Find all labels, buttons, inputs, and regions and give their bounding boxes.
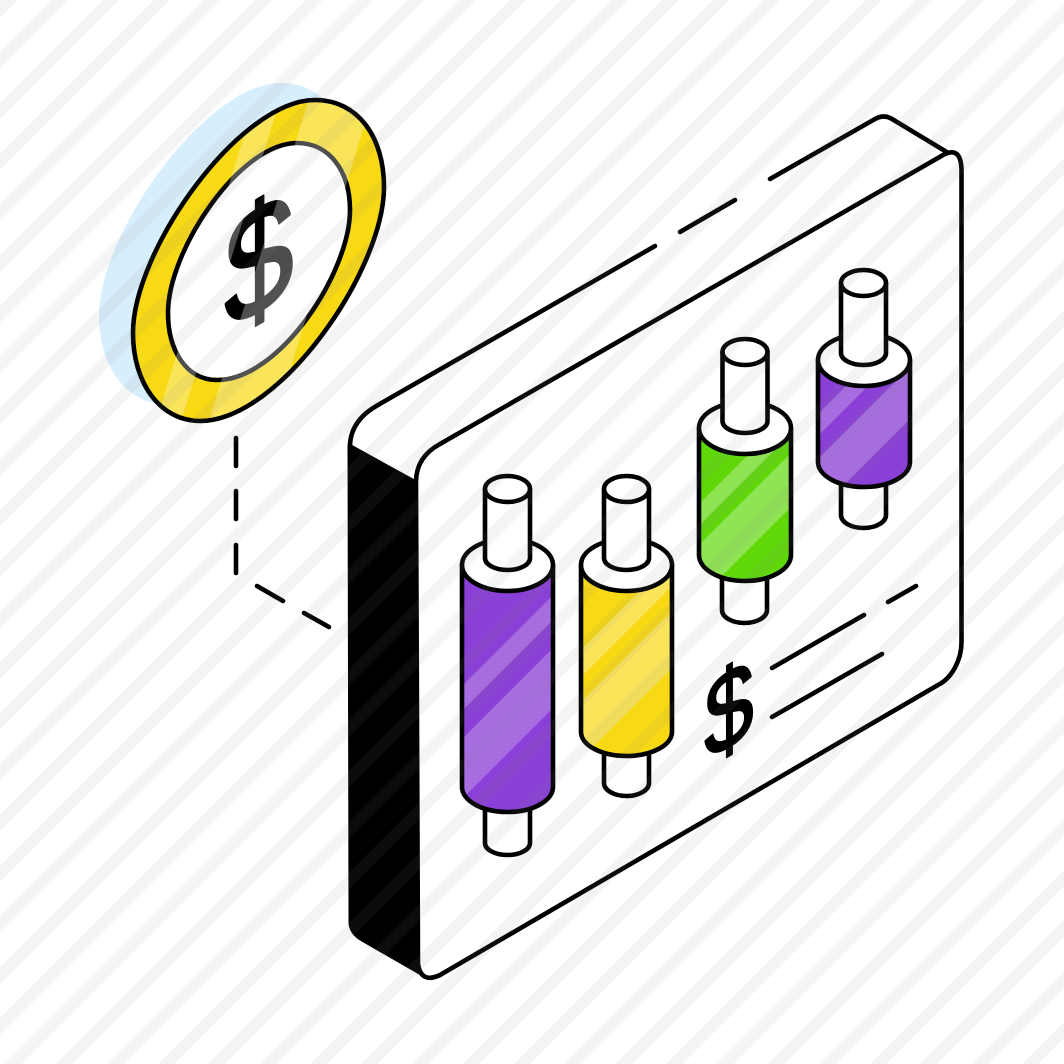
dollar sign on board: $ [704,631,754,786]
candle: purple short [818,270,910,528]
board [349,116,962,978]
coin shadow [99,83,350,404]
board front [416,152,962,978]
text lines on board [772,586,916,717]
coin rim [133,100,384,421]
candle: purple tall [462,476,553,855]
coin gloss [162,102,364,418]
coin face [168,143,350,380]
dollar sign on coin: $ [224,152,294,366]
board side [349,445,428,978]
candle: yellow [580,476,672,796]
dashed connector [236,438,329,627]
coin [99,83,386,424]
candle: green [699,339,791,623]
coin outline [133,100,384,421]
board top edge [350,116,950,445]
